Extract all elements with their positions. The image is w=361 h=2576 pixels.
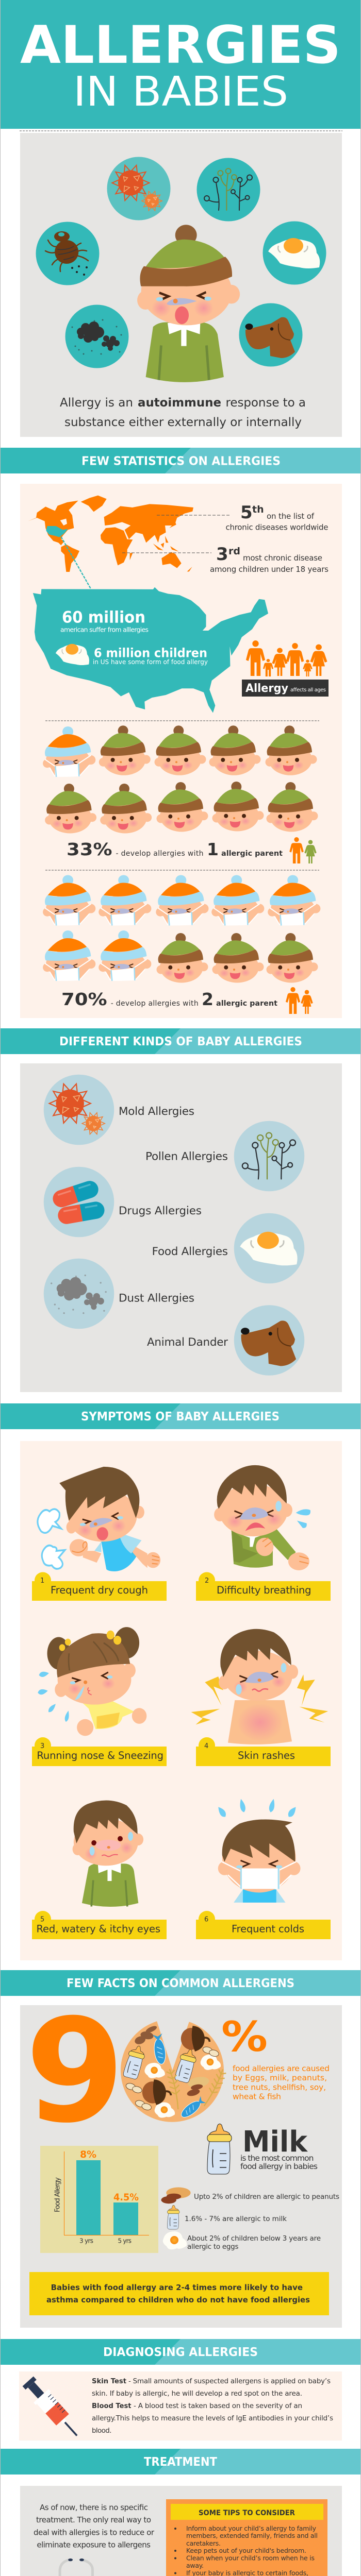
- illustration: coughing boy: [38, 1467, 160, 1571]
- illustration: boy with difficulty breathing: [214, 1465, 310, 1570]
- fact: peanuts: Upto 2% of children are allergic to peanuts: [194, 2193, 339, 2201]
- illustration: sneezing girl: [38, 1627, 146, 1736]
- label 6: frequent colds: Frequent colds: [232, 1923, 304, 1935]
- fact: eggs: allergic to eggs: [187, 2243, 238, 2251]
- mold allergies: [44, 1075, 194, 1145]
- label 1: frequent dry cough: [32, 1572, 167, 1601]
- illustration: boy with mask: [216, 1798, 301, 1903]
- icon: parents both allergic: [286, 987, 313, 1014]
- header band: [0, 0, 361, 129]
- tips heading: SOME TIPS TO CONSIDER: [199, 2509, 295, 2517]
- banner: different kinds: DIFFERENT KINDS OF BABY ALLERGIES: [59, 1034, 302, 1048]
- icon: milk bottle: [207, 2124, 232, 2174]
- stat: 3rd: 3: [216, 544, 228, 565]
- food allergies: Food Allergies: [152, 1245, 228, 1258]
- stat: 5th: 5: [240, 502, 253, 523]
- stat: 70 percent: 70%: [61, 989, 107, 1009]
- label 3: running nose: [32, 1737, 167, 1766]
- text: milk: food allergy in babies: [240, 2162, 318, 2171]
- stat: 60 million: 60 million: [62, 608, 145, 627]
- banner: few statistics: [1, 448, 360, 473]
- banner: diagnosing: DIAGNOSING ALLERGIES: [103, 2345, 258, 2359]
- intro text: autoimmune: [138, 396, 221, 410]
- diagnosis text: Skin Test: [92, 2377, 127, 2385]
- icon: pollen circle: [197, 158, 260, 222]
- callout: allergy affects all ages: [242, 680, 329, 697]
- stat: 5th: on the list of: [267, 512, 315, 521]
- stat: 3rd: most chronic disease: [243, 553, 322, 563]
- illustration: boy with red eyes: [73, 1800, 143, 1907]
- world map: [28, 496, 193, 589]
- panel: food allergens: [20, 1989, 342, 2328]
- treatment text: [34, 2503, 155, 2550]
- treatment text: treatment. The only real way to: [36, 2515, 151, 2524]
- percent sign: %: [221, 2013, 268, 2061]
- pollen allergies: [145, 1121, 304, 1191]
- stat: 5th: [226, 502, 328, 532]
- panel: symptoms: [20, 1441, 342, 1960]
- bar: 5 yrs: [113, 2202, 138, 2235]
- stat: 33 percent: - develop allergies with: [116, 850, 203, 858]
- chart: food allergy by age: 5 yrs: [118, 2237, 132, 2244]
- fact: eggs: [163, 2231, 321, 2251]
- label 5: red eyes: Red, watery & itchy eyes: [36, 1923, 160, 1935]
- map of usa: [33, 587, 268, 713]
- text: milk: is the most common: [240, 2154, 314, 2163]
- fact: peanuts: [161, 2188, 339, 2204]
- food allergies: [152, 1213, 304, 1283]
- banner: symptoms: [1, 1403, 360, 1429]
- stat: 33 percent: 1: [207, 839, 219, 859]
- icon: dust circle: [65, 305, 129, 368]
- panel: statistics: [20, 484, 342, 1018]
- banner: different kinds: [1, 1028, 360, 1054]
- stat: 70 percent: - develop allergies with: [111, 999, 199, 1008]
- banner: treatment: [1, 2449, 360, 2475]
- diagnosis text: - A blood test is taken based on the severity of an: [134, 2402, 302, 2410]
- tips list: [174, 2524, 318, 2576]
- banner: few statistics: FEW STATISTICS ON ALLERGIES: [81, 453, 281, 468]
- banner: few facts: [1, 1970, 360, 1996]
- intro text: response to a: [226, 396, 306, 410]
- drugs allergies: Drugs Allergies: [119, 1205, 202, 1217]
- stat: 33 percent: 33%: [67, 839, 112, 859]
- icon: dust mite circle: [36, 222, 99, 285]
- fact: milk: [167, 2205, 287, 2229]
- animal dander: [147, 1305, 304, 1376]
- label 5: red eyes: [32, 1911, 167, 1939]
- map of usa: in US have some form of food allergy: [93, 658, 208, 666]
- panel: treatment: [20, 2486, 342, 2576]
- label 4: skin rashes: 4: [204, 1742, 208, 1750]
- diagnosis text: blood.: [92, 2427, 111, 2435]
- label 6: frequent colds: 6: [204, 1916, 208, 1924]
- label 4: skin rashes: Skin rashes: [238, 1750, 295, 1761]
- label 3: running nose: 3: [40, 1742, 44, 1750]
- treatment text: As of now, there is no specific: [40, 2503, 148, 2512]
- map of usa: american suffer from alllergies: [60, 625, 149, 634]
- text: milk: [240, 2125, 318, 2171]
- stat: 70 percent: [61, 987, 313, 1014]
- label 4: skin rashes: [196, 1737, 331, 1766]
- title: in babies: IN BABIES: [73, 68, 288, 115]
- drugs allergies: [44, 1167, 202, 1237]
- treatment text: eliminate exposure to allergens: [37, 2540, 151, 2550]
- chart: food allergy by age: 8%: [80, 2149, 96, 2160]
- chart: food allergy by age: 3 yrs: [79, 2237, 93, 2244]
- banner: diagnosing: [1, 2339, 360, 2365]
- pollen allergies: Pollen Allergies: [145, 1150, 228, 1163]
- diagnosis text: Blood Test: [92, 2402, 132, 2410]
- text: food allergies caused by: food allergies are caused: [233, 2064, 330, 2073]
- title: allergies: ALLERGIES: [20, 14, 341, 75]
- panel: kinds of allergies: [20, 1063, 342, 1392]
- callout: asthma: [29, 2272, 329, 2315]
- tips heading: [171, 2504, 323, 2520]
- treatment text: deal with allergies is to reduce or: [34, 2528, 155, 2537]
- stat: 5th: chronic diseases worldwide: [226, 522, 328, 532]
- label 5: red eyes: 5: [40, 1916, 44, 1924]
- stat: 5th: th: [252, 504, 264, 515]
- big number 9: 9: [25, 1989, 125, 2155]
- callout: allergy affects all ages: affects all ages: [290, 687, 326, 693]
- label 3: running nose: Running nose & Sneezing: [37, 1750, 163, 1761]
- diagnosis text: [92, 2377, 333, 2435]
- callout: asthma: Babies with food allergy are 2-4 times more likely to have: [51, 2283, 303, 2292]
- label 1: frequent dry cough: Frequent dry cough: [51, 1584, 148, 1596]
- diagnosis text: allergy.This helps to measure the levels of IgE antibodies in your child’s: [92, 2414, 333, 2422]
- fact: milk: 1.6% - 7% are allergic to milk: [185, 2215, 287, 2223]
- baby grid: two allergic parents: [43, 875, 320, 983]
- stat: 33 percent: allergic parent: [221, 850, 283, 858]
- tips list: away.: [186, 2562, 204, 2569]
- tips list: Clean when your child’s room when he is: [186, 2554, 315, 2562]
- icon: family: [246, 640, 327, 676]
- icon: mold circle: [107, 157, 170, 221]
- illustration: boy with skin rash: [191, 1629, 328, 1744]
- text: food allergies caused by: [233, 2064, 330, 2101]
- icon: egg on map: [56, 644, 89, 665]
- label 1: frequent dry cough: 1: [40, 1577, 44, 1585]
- text: food allergies caused by: tree nuts, shellfish, soy,: [233, 2083, 326, 2092]
- panel: diagnosing: [19, 2371, 342, 2443]
- banner: few facts: FEW FACTS ON COMMON ALLERGENS: [67, 1976, 294, 1990]
- label 2: difficulty breathing: 2: [205, 1577, 209, 1585]
- baby grid: one allergic parent: [43, 725, 318, 834]
- icon: syringe: [21, 2375, 85, 2443]
- diagnosis text: skin. If baby is allergic, he will develop a red spot on the area.: [92, 2389, 302, 2398]
- mold allergies: Mold Allergies: [119, 1105, 194, 1118]
- banner: treatment: TREATMENT: [144, 2454, 217, 2469]
- stat: 3rd: among children under 18 years: [210, 565, 329, 574]
- stat: 33 percent: [67, 837, 317, 863]
- icon: egg circle: [263, 222, 326, 284]
- text: milk: Milk: [242, 2125, 308, 2159]
- intro text: [60, 396, 306, 429]
- banner: symptoms: SYMPTOMS OF BABY ALLERGIES: [81, 1409, 280, 1423]
- tips box: [166, 2499, 327, 2576]
- dust allergies: [44, 1259, 194, 1329]
- chart: food allergy by age: 4.5%: [113, 2192, 139, 2203]
- food pie: [121, 2021, 228, 2122]
- text: food allergies caused by: wheat & fish: [233, 2092, 281, 2101]
- label 2: difficulty breathing: Difficulty breathing: [217, 1584, 311, 1596]
- icon: parents one allergic: [289, 837, 317, 863]
- callout: asthma: asthma compared to children who do not have food allergies: [46, 2295, 310, 2304]
- label 6: frequent colds: [196, 1911, 331, 1939]
- fact: eggs: About 2% of children below 3 years are: [187, 2234, 321, 2243]
- animal dander: Animal Dander: [147, 1336, 228, 1349]
- illustration: sneezing baby: [137, 225, 240, 382]
- stat: 6 million children: 6 million children: [94, 646, 207, 660]
- stat: 3rd: rd: [228, 546, 240, 557]
- label 2: difficulty breathing: [196, 1572, 331, 1601]
- stat: 70 percent: allergic parent: [216, 999, 277, 1008]
- dust allergies: Dust Allergies: [119, 1292, 194, 1304]
- panel: intro: [20, 133, 342, 437]
- text: food allergies caused by: by Eggs, milk, peanuts,: [233, 2073, 327, 2082]
- callout: allergy affects all ages: Allergy: [245, 682, 288, 695]
- tips list: Keep pets out of your child's bedroom.: [186, 2547, 306, 2554]
- icon: dog circle: [239, 303, 302, 367]
- bar: 3 yrs: [76, 2160, 101, 2235]
- stat: 3rd: [210, 544, 329, 574]
- tips list: caretakers.: [186, 2539, 221, 2547]
- tips list: members, extended family, friends and all: [186, 2532, 318, 2539]
- stat: 70 percent: 2: [202, 989, 214, 1009]
- chart: food allergy by age: Food Allergy: [54, 2177, 62, 2212]
- intro text: substance either externally or internally: [64, 416, 302, 429]
- chart: food allergy by age: [40, 2146, 158, 2253]
- tips list: Inform about your child’s allergy to family: [186, 2524, 317, 2532]
- diagnosis text: - Small amounts of suspected allergens is applied on baby’s: [128, 2377, 331, 2385]
- intro text: Allergy is an: [60, 396, 133, 410]
- icon: stethoscope: [60, 2558, 120, 2576]
